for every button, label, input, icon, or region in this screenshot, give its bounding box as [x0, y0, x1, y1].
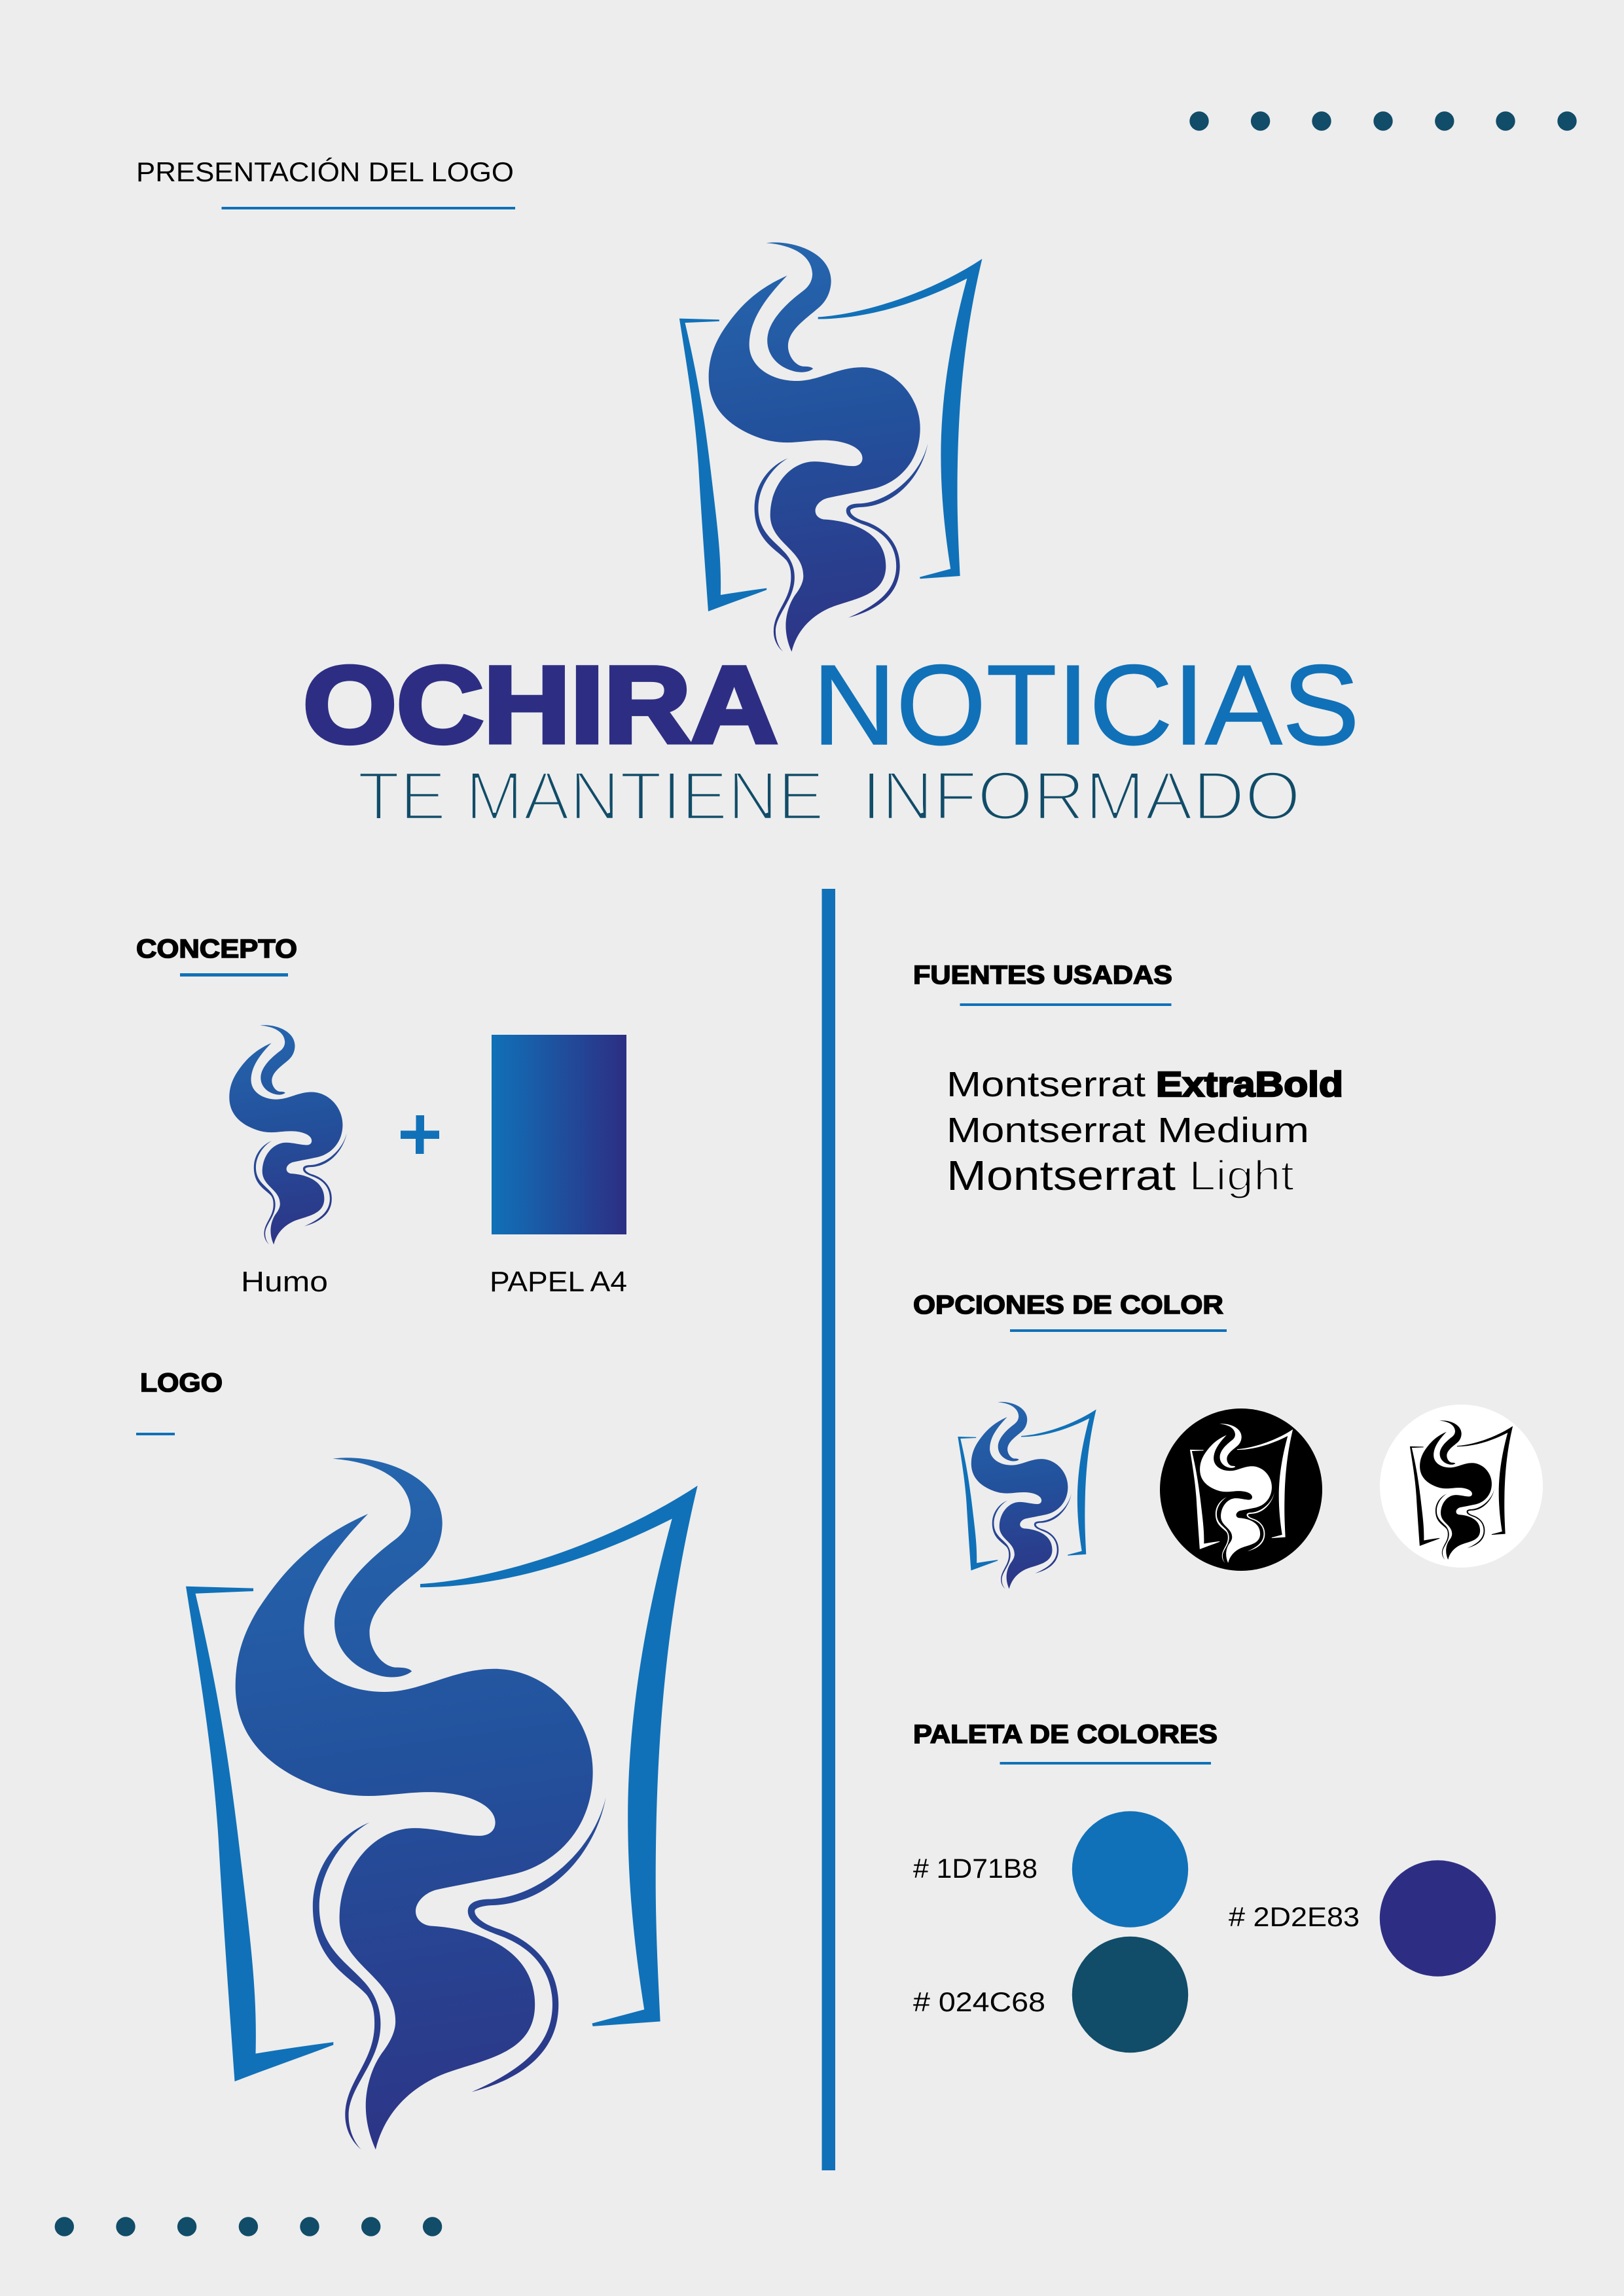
font sample: light: Montserrat [947, 1152, 1176, 1199]
heading: logo [136, 1369, 223, 1435]
panel: concepto [136, 935, 627, 1298]
heading: paleta de colores [913, 1720, 1218, 1765]
tagline [357, 758, 1301, 834]
swatch: 1D71B8 [913, 1811, 1188, 1928]
panel: fuentes usadas [913, 961, 1343, 1199]
panel: paleta de colores [913, 1720, 1496, 2053]
font sample: medium [947, 1111, 1309, 1150]
brand name: OCHIRA NOTICIAS: OCHIRA [303, 645, 778, 766]
tagline: INFORMADO [861, 758, 1301, 834]
heading: opciones de color: OPCIONES DE COLOR [913, 1291, 1223, 1319]
swatch: 024C68: # 024C68 [913, 1986, 1045, 2017]
heading: concepto [136, 935, 297, 977]
heading: presentación del logo: PRESENTACIÓN DEL LOGO [136, 156, 514, 187]
colour option: full colour logo [958, 1402, 1096, 1589]
paper A4 gradient rectangle [492, 1035, 626, 1234]
main logo mark [679, 242, 982, 652]
font sample: extrabold [947, 1065, 1343, 1104]
heading: logo: LOGO [140, 1369, 223, 1397]
swatch: 2D2E83 [1229, 1860, 1496, 1977]
font sample: light: Light [1189, 1152, 1294, 1199]
heading: paleta de colores: PALETA DE COLORES [913, 1720, 1218, 1749]
vertical divider [822, 889, 835, 2170]
heading: fuentes usadas: FUENTES USADAS [913, 961, 1172, 990]
swatch: 2D2E83: # 2D2E83 [1229, 1901, 1360, 1932]
brand name: OCHIRA NOTICIAS: NOTICIAS [812, 641, 1360, 768]
panel: opciones de color [913, 1291, 1543, 1589]
font sample: light [947, 1152, 1294, 1199]
swatch: 1D71B8: # 1D71B8 [913, 1853, 1038, 1884]
label: papel A4: PAPEL A4 [490, 1266, 627, 1298]
decorative dots: top right [1189, 111, 1577, 131]
large logo mark [186, 1458, 698, 2149]
font sample: medium: Medium [1157, 1111, 1309, 1150]
icon: humo (smoke) [229, 1025, 347, 1244]
font sample: extrabold: Montserrat [947, 1065, 1146, 1104]
brand name: OCHIRA NOTICIAS [303, 641, 1360, 768]
icon: plus sign [401, 1115, 439, 1154]
heading: presentación del logo [136, 156, 515, 209]
colour option: black logo on white circle [1380, 1405, 1543, 1568]
tagline: TE MANTIENE [357, 758, 824, 834]
swatch: 024C68 [913, 1937, 1188, 2053]
font sample: medium: Montserrat [947, 1111, 1146, 1150]
colour option: white logo on black circle [1160, 1408, 1322, 1571]
label: humo: Humo [241, 1266, 328, 1298]
decorative dots: bottom left [55, 2217, 442, 2236]
heading: fuentes usadas [913, 961, 1172, 1006]
font sample: extrabold: ExtraBold [1156, 1065, 1343, 1104]
heading: opciones de color [913, 1291, 1227, 1332]
heading: concepto: CONCEPTO [136, 935, 297, 963]
